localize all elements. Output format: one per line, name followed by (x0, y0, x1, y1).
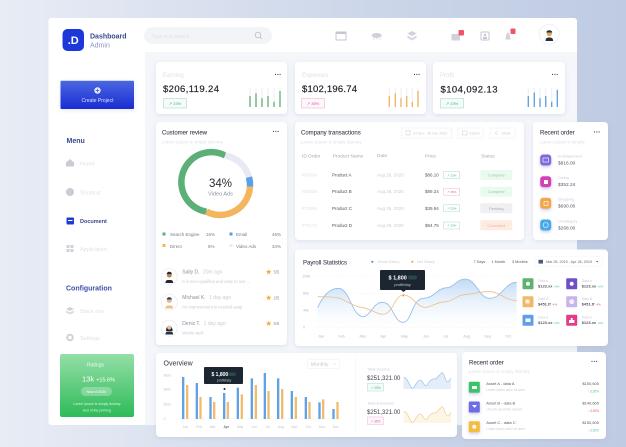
chart tooltip (380, 270, 425, 292)
table row C: #73094 (302, 206, 318, 211)
bar chart: Apr (224, 425, 230, 429)
donut label: Video Ads (208, 192, 233, 198)
panel: customer review: Customer review (162, 130, 208, 136)
panel: customer review: ··· (272, 129, 280, 136)
table row D: $94.75 (425, 223, 439, 228)
asset A row (469, 381, 600, 394)
line chart: Jun (423, 335, 429, 339)
bar chart: Jan (183, 425, 188, 429)
order: entertainment: Entertainment (558, 154, 583, 158)
date selector (535, 256, 602, 266)
chart tooltip: profit/day (394, 282, 411, 287)
bar chart: 0 (164, 417, 166, 421)
menu item: settings (67, 335, 100, 342)
menu item: document: Document (80, 219, 107, 225)
panel: overview: Overview (164, 360, 194, 368)
asset B row (469, 400, 600, 413)
panel: overview (156, 353, 457, 437)
bar chart: Oct (306, 425, 311, 429)
mini stats grid: $123.xx +6% (582, 284, 604, 288)
asset A row: Lorem Ipsum dolor sit amet (486, 388, 525, 392)
total income: $251,321.00 (367, 376, 401, 382)
panel: company transactions: Company transactions (301, 130, 361, 136)
bar chart: Jun (251, 425, 257, 429)
table row B (302, 187, 512, 197)
asset B row: Ut enim ad minim veniam (486, 408, 523, 412)
panel: recent order (categories): Recent order (540, 130, 575, 136)
panel: payroll statistics: Payroll Statistics (303, 260, 347, 266)
mini stats grid (522, 278, 604, 326)
mini stats grid: $451.tf -4% (582, 302, 601, 306)
button: create project (60, 81, 134, 109)
review: Sally D.: Sally D. 20m ago (182, 270, 223, 276)
asset B row: Asset B - data B (486, 400, 516, 406)
donut legend: Video Ads (236, 244, 257, 249)
table row A: Product A (332, 172, 352, 178)
table row D: Product D (332, 223, 353, 228)
stat card: earning: Earning (163, 73, 184, 79)
line chart: Jan (318, 335, 324, 339)
panel: customer review (156, 122, 287, 345)
review: Sally D. (161, 269, 280, 285)
table row D: Cancelled (487, 223, 505, 228)
asset A row: $150,605 (582, 381, 600, 386)
table header: Date (377, 153, 387, 159)
line chart: Jul (444, 335, 449, 339)
configuration heading: Configuration (66, 286, 112, 292)
mini stats grid: Data B (582, 297, 593, 301)
donut legend: 5% (208, 244, 215, 249)
asset A row: ↑ 3.26% (587, 390, 599, 394)
asset C row (469, 420, 600, 432)
donut chart (181, 152, 250, 215)
ratings card: New of 2020 (87, 390, 106, 394)
bar chart: Nov (319, 425, 325, 429)
line chart: May (401, 335, 408, 339)
search bar: Type in to search .. (152, 34, 194, 40)
table row A: ↗ 23% (447, 173, 457, 177)
donut legend: Email (236, 232, 247, 237)
line chart: Aug (463, 335, 470, 339)
order: uncategory: Uncategory (558, 220, 578, 224)
monthly dropdown (308, 360, 340, 368)
panel: customer review: Lorem Ipsum is simply dummy (162, 140, 224, 144)
chart tooltip: $ 1,800 (388, 276, 407, 282)
menu item: home (66, 159, 95, 168)
date selector: Mar 26, 2019 - Apr 26, 2019 (546, 260, 592, 264)
range tabs (474, 260, 528, 264)
stat card: expenses: $102,196.74 (302, 84, 357, 95)
stat card: profit (433, 62, 565, 114)
table row C (302, 203, 512, 213)
order: dining (540, 176, 576, 188)
table header: ID Order (302, 154, 321, 160)
top bar icons (336, 28, 516, 40)
menu item: document (66, 218, 107, 225)
menu item: stack dev (66, 307, 104, 315)
order: shopping: Shopping (558, 198, 574, 202)
table row C: Pending (489, 206, 504, 211)
filter buttons: Share (502, 131, 511, 135)
total expenses: ↗ 35% (371, 419, 381, 423)
table row B: ↗ 35% (447, 190, 457, 194)
mini stats grid: Data A (582, 279, 593, 283)
filter buttons (402, 128, 515, 138)
bar chart: Feb (196, 425, 202, 429)
table row A (302, 170, 512, 180)
menu item: application: Application (80, 247, 107, 253)
table header: Product Name (333, 154, 364, 160)
table row D: Aug 26, 2020 (377, 223, 404, 228)
donut legend: Search Engine (170, 232, 200, 237)
mini stats grid: $451.tf -4% (538, 302, 557, 306)
line chart: Apr (380, 335, 387, 339)
stat card: profit: $104,092.13 (440, 84, 498, 96)
bar chart: $60k (164, 373, 171, 377)
ratings card: Lorem Ipsum is simply dummy (73, 402, 121, 406)
table row D: #72173 (302, 223, 318, 228)
review: Michael K. (161, 294, 280, 310)
filter buttons: 24 Nov - 26 Dec 2020 (413, 131, 447, 135)
asset C row: Lorem Ipsum dolor sit amet (486, 427, 525, 431)
review: Deniz T.: Deniz T. 1 day ago (182, 321, 226, 327)
stat card: expenses: ··· (414, 72, 420, 79)
range tabs: 3 Months (512, 260, 528, 264)
table row B: Product B (332, 189, 352, 194)
asset B row: ↓ 3.26% (587, 409, 599, 413)
line chart: Sep (484, 335, 491, 339)
panel: recent order (assets) (462, 352, 606, 439)
brand name: Dashboard (90, 34, 127, 40)
menu item: home: Home (80, 162, 95, 168)
overview tooltip: profit/day (217, 378, 231, 382)
panel: recent order (assets): Recent order (469, 360, 504, 366)
order: uncategory: $268.00 (558, 226, 576, 232)
menu item: stack dev: Stack dev (80, 309, 104, 315)
asset A row: Asset A - data A (486, 381, 515, 386)
menu item: shortcut (66, 188, 101, 196)
table header: Price (425, 154, 436, 160)
menu item: shortcut: Shortcut (80, 190, 101, 196)
asset C row: ↑ 3.26% (587, 428, 599, 432)
review: Michael K.: 2/5 (274, 295, 280, 300)
panel: company transactions: Lorem Ipsum is simply dummy (301, 140, 363, 144)
panel: recent order (categories) (533, 122, 608, 240)
table row D (302, 220, 512, 230)
order: shopping: $690.00 (558, 204, 576, 210)
table row D: ↗ 23% (447, 224, 457, 228)
overview tooltip: $ 1,800 (212, 372, 228, 378)
donut legend: 34% (272, 244, 281, 249)
main white panel (48, 18, 577, 425)
ratings card: text of the printing (83, 408, 111, 412)
bar chart: Jul (265, 425, 270, 429)
review: Michael K.: Michael K. 1 day ago (182, 295, 231, 301)
bar chart: Dec (333, 425, 339, 429)
logo: .D (68, 35, 79, 47)
donut label: 34% (209, 178, 232, 190)
payroll legend (371, 260, 435, 264)
line chart: Mar (360, 335, 367, 339)
search bar (144, 27, 272, 44)
table row B: Aug 26, 2020 (377, 189, 404, 194)
total expenses: Total Expenses (367, 400, 394, 406)
line chart: 100k (302, 274, 310, 278)
line chart (302, 274, 517, 339)
payroll legend: Gross Salary (378, 260, 400, 264)
order: dining: Dining (558, 176, 569, 180)
table row C: Aug 26, 2020 (377, 206, 404, 211)
line chart: 0 (303, 325, 305, 329)
donut label (208, 178, 233, 198)
ratings card: 13k +15.6% (82, 374, 115, 384)
total income: ↗ 23% (371, 386, 381, 390)
bar chart: Aug (278, 425, 284, 429)
stat card: expenses: Expenses (302, 73, 328, 79)
bar chart: $20k (164, 402, 171, 406)
panel: company transactions (295, 122, 524, 240)
stat card: profit: Profit (440, 73, 454, 79)
review: Deniz T.: 5/5 (274, 321, 280, 326)
table row C: ↗ 23% (447, 207, 457, 211)
menu item: settings: Settings (80, 336, 100, 342)
ratings card (60, 354, 134, 417)
brand name (90, 34, 127, 50)
mini stats grid: $123.xx +6% (538, 320, 560, 325)
order: uncategory (540, 220, 578, 232)
donut legend: 46% (272, 232, 281, 237)
table header: Status (481, 154, 495, 160)
table header (302, 153, 495, 160)
order: shopping (540, 198, 576, 210)
order: dining: $352.24 (558, 182, 576, 188)
line chart: 40k (303, 308, 309, 312)
mini stats grid: Data A (582, 316, 593, 320)
stat card: earning: $206,119.24 (163, 84, 219, 95)
stat card: earning (156, 62, 287, 114)
donut legend: 16% (206, 232, 215, 237)
stat card: profit: ··· (552, 72, 558, 79)
overview tooltip (204, 367, 243, 390)
review: Sally D.: 5/5 (274, 270, 280, 274)
total income: Total Income (367, 366, 390, 372)
range tabs: 1 Month (492, 260, 505, 264)
stat card: expenses: ↗ 35% (307, 101, 320, 106)
stat card: earning: ··· (274, 72, 282, 79)
stat card: expenses (295, 62, 426, 114)
menu heading: Menu (66, 138, 85, 145)
order: entertainment (540, 154, 583, 166)
panel: recent order (assets): ··· (591, 359, 598, 366)
total expenses: $251,321.00 (367, 410, 401, 416)
review: Michael K.: An improvement is needed asap (182, 304, 243, 310)
panel: recent order (assets): Lorem Ipsum is simply dummy (469, 369, 531, 374)
table row B: $89.24 (425, 189, 439, 194)
panel: payroll statistics (295, 250, 608, 346)
filter buttons: Export (470, 131, 480, 135)
donut legend: Direct (170, 244, 183, 249)
bar chart (164, 373, 342, 429)
line chart: 80k (303, 291, 309, 295)
table row A: Aug 26, 2020 (377, 172, 404, 178)
ratings card: Ratings (87, 362, 104, 368)
line chart: Feb (339, 335, 345, 339)
brand name: Admin (90, 42, 110, 50)
table row B: Complete (488, 189, 506, 194)
review: Sally D.: It is over qualified and easy to use ... (182, 279, 250, 284)
user avatar (539, 24, 559, 44)
bar chart: Mar (210, 425, 216, 429)
mini stats grid: $123.xx +6% (538, 284, 560, 288)
asset C row: Asset C - data C (486, 420, 516, 425)
table row C: Product C (332, 206, 353, 211)
table row A: Complete (488, 172, 506, 178)
asset C row: $150,605 (582, 420, 600, 425)
logo (62, 29, 84, 51)
stat card: profit: ↗ 23% (446, 101, 459, 106)
table row B: #63508 (302, 189, 318, 194)
stat card: earning: ↗ 23% (169, 101, 182, 106)
button: create project: Create Project (82, 98, 114, 104)
panel: recent order (categories): Lorem Ipsum is simply (540, 140, 586, 144)
content background (145, 52, 577, 425)
mini stats grid: $123.xx +6% (582, 320, 604, 325)
table row A: #50934 (302, 172, 318, 178)
order: entertainment: $816.00 (558, 160, 576, 166)
bar chart: $40k (164, 388, 171, 392)
total income (367, 366, 451, 391)
menu item: application (66, 245, 107, 253)
table row C: $39.94 (425, 206, 439, 211)
mini stats grid: Data A (538, 279, 549, 283)
mini stats grid: Data B (538, 297, 549, 301)
bar chart: May (237, 425, 244, 429)
range tabs: 7 Days (474, 260, 485, 264)
table row A: $86.10 (425, 172, 439, 178)
panel: recent order (categories): ··· (594, 130, 600, 136)
bar chart: Sep (291, 425, 297, 429)
payroll legend: Net Salary (417, 260, 435, 264)
monthly dropdown: Monthly (311, 362, 329, 368)
review: Deniz T.: Works well! (182, 330, 204, 336)
asset B row: $140,605 (582, 400, 600, 406)
line chart: Oct (505, 335, 511, 339)
mini stats grid: Data A (538, 316, 549, 320)
donut legend (162, 232, 281, 249)
total expenses (367, 400, 451, 424)
review: Deniz T. (161, 320, 280, 336)
